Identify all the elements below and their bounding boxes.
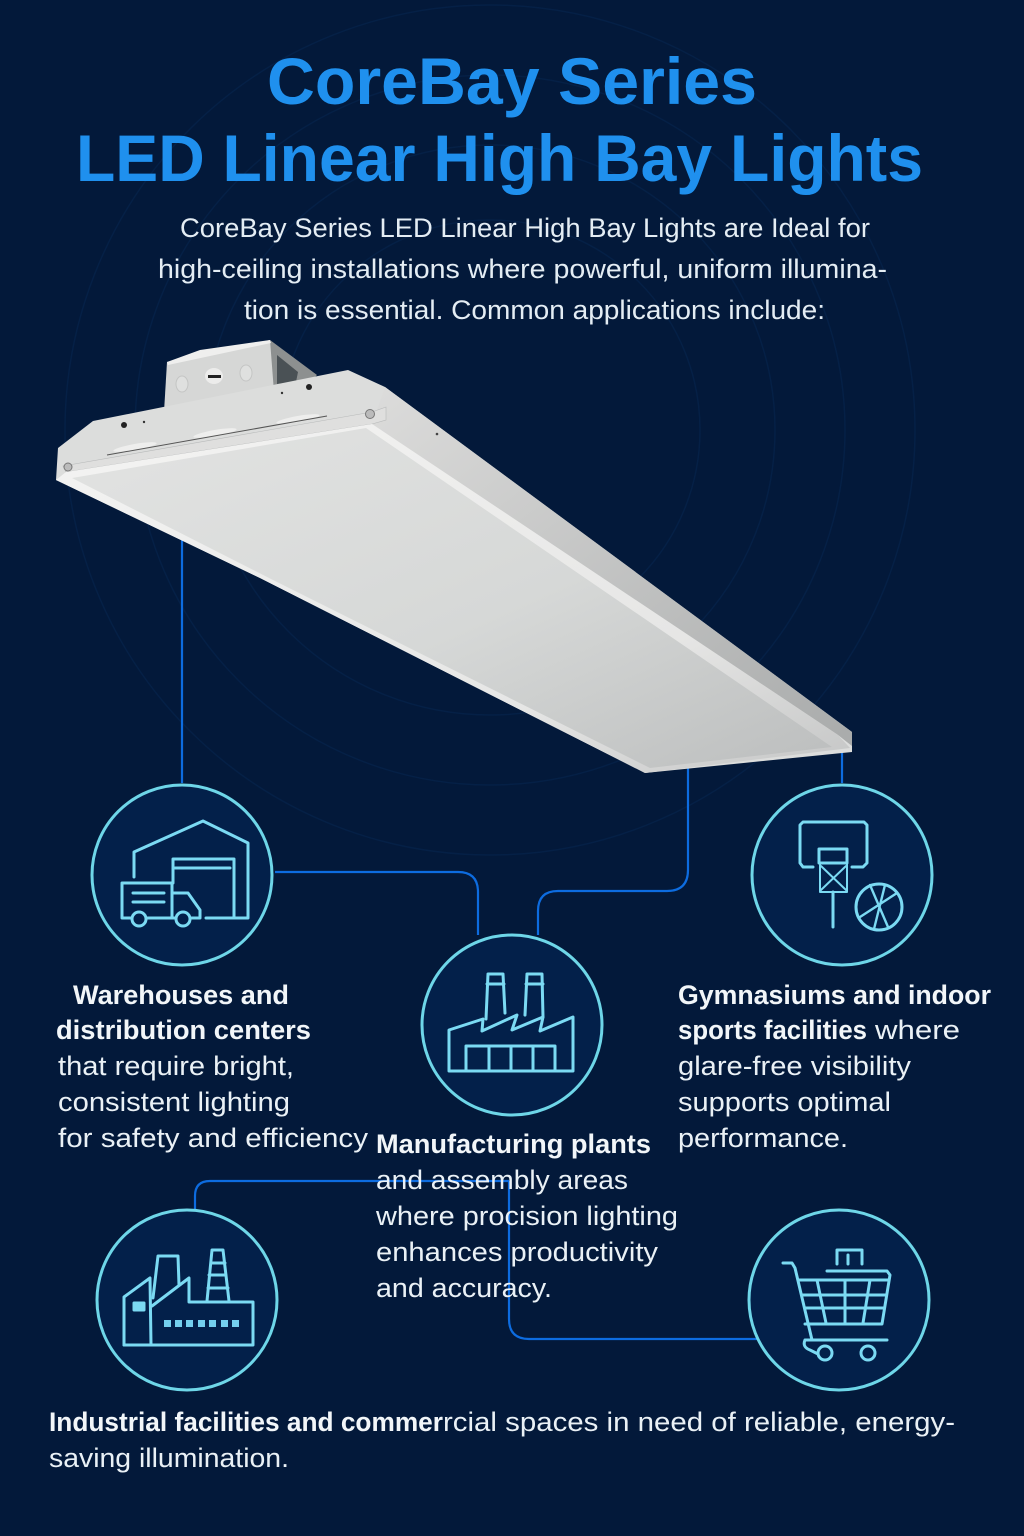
text: industrial facilities: saving illumination.	[49, 1443, 289, 1473]
circle icon: shopping cart	[749, 1210, 929, 1390]
text: manufacturing: where procision lighting	[375, 1201, 678, 1231]
connector lines	[182, 530, 842, 1339]
text: warehouses: consistent lighting	[58, 1087, 290, 1117]
lens panel	[72, 428, 832, 768]
ridge seam and bumps	[107, 412, 327, 455]
text: manufacturing: enhances productivity	[376, 1237, 659, 1267]
housing right side face	[372, 387, 852, 746]
screws and holes	[64, 384, 438, 471]
text: manufacturing: and assembly areas	[376, 1165, 628, 1195]
text: gymnasiums: Gymnasiums and indoor	[678, 980, 991, 1010]
text: warehouses	[56, 980, 369, 1153]
text: gymnasiums: sports facilities	[678, 1015, 867, 1045]
title	[76, 44, 923, 195]
text: industrial facilities	[49, 1407, 955, 1473]
item: warehouses	[56, 785, 369, 1153]
circle icon: basketball hoop and ball	[752, 785, 932, 965]
text: warehouses: distribution centers	[56, 1015, 311, 1045]
text: gymnasiums: where	[874, 1015, 960, 1045]
title: LED Linear High Bay Lights	[76, 121, 923, 195]
text: warehouses: for safety and efficiency	[58, 1123, 369, 1153]
circle icon: industrial factory	[97, 1210, 277, 1390]
circle icon: warehouse and truck	[92, 785, 272, 965]
text: gymnasiums	[678, 980, 991, 1153]
intro text: CoreBay Series LED Linear High Bay Lights are Ideal for	[180, 213, 870, 243]
text: industrial facilities: Industrial facilities and commer	[49, 1407, 443, 1437]
intro text: high-ceiling installations where powerful, uniform illumina-	[158, 254, 887, 284]
circle icon: factory with two chimneys	[422, 935, 602, 1115]
junction box	[164, 340, 317, 412]
text: warehouses: Warehouses and	[73, 980, 289, 1010]
text: manufacturing: and accuracy.	[376, 1273, 552, 1303]
product: LED linear high bay light	[56, 340, 852, 773]
intro text	[158, 213, 887, 325]
intro text: tion is essential. Common applications include:	[244, 295, 825, 325]
text: manufacturing: Manufacturing plants	[376, 1129, 651, 1159]
item: manufacturing	[375, 935, 678, 1303]
text: gymnasiums: supports optimal	[678, 1087, 891, 1117]
housing body	[56, 370, 852, 773]
text: gymnasiums: glare-free visibility	[678, 1051, 912, 1081]
text: gymnasiums: performance.	[678, 1123, 848, 1153]
text: manufacturing	[375, 1129, 678, 1303]
item: gymnasiums	[678, 785, 991, 1153]
background concentric rings	[65, 5, 915, 855]
title: CoreBay Series	[267, 44, 757, 118]
lens frame	[56, 424, 850, 773]
text: warehouses: that require bright,	[58, 1051, 294, 1081]
housing lens ridge	[63, 407, 386, 472]
text: industrial facilities: rcial spaces in need of reliable, energy-	[443, 1407, 955, 1437]
